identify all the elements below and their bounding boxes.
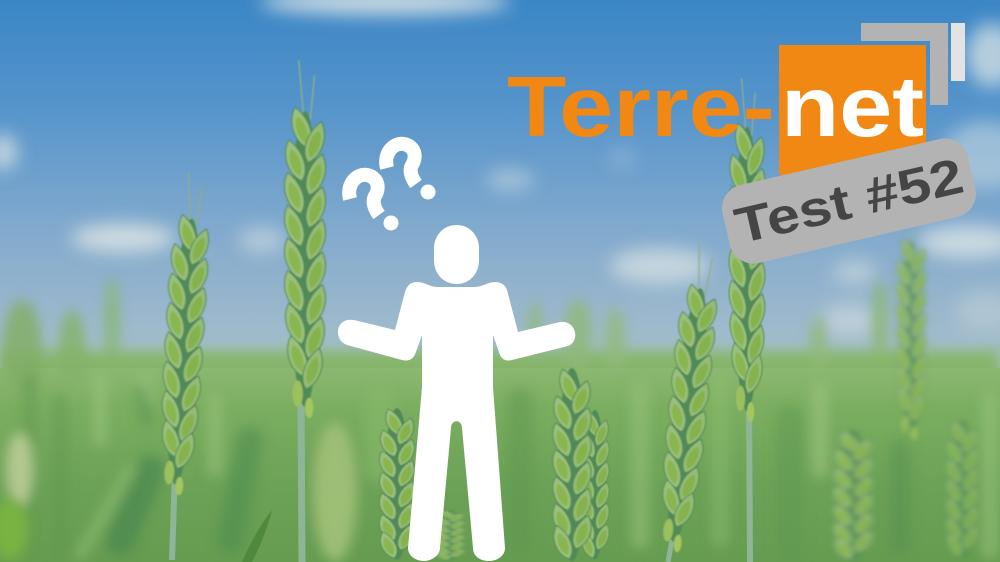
logo: light bar	[951, 23, 965, 81]
icon: shrugging person	[338, 225, 575, 561]
wheat ear 3	[724, 78, 770, 562]
logo: grey corner bracket	[861, 23, 948, 105]
badge: Test #52: Test #52	[730, 148, 968, 254]
wheat ear 2	[279, 60, 331, 562]
wheat ear 4	[648, 242, 730, 562]
logo: net wordmark: net	[781, 60, 924, 155]
wheat ear 1	[150, 171, 219, 560]
blurred foreground and distant wheat ears	[0, 208, 982, 562]
badge: Test #52	[717, 134, 981, 268]
logo: Terre- wordmark: Terre-	[507, 60, 775, 155]
logo: orange square	[779, 45, 926, 175]
sky background	[0, 0, 1000, 375]
wheat ear 6	[374, 407, 420, 560]
wheat ear 5	[547, 367, 613, 561]
icon: question marks	[349, 144, 436, 230]
wheat field blurred background	[0, 277, 1000, 562]
clouds	[0, 0, 1000, 336]
